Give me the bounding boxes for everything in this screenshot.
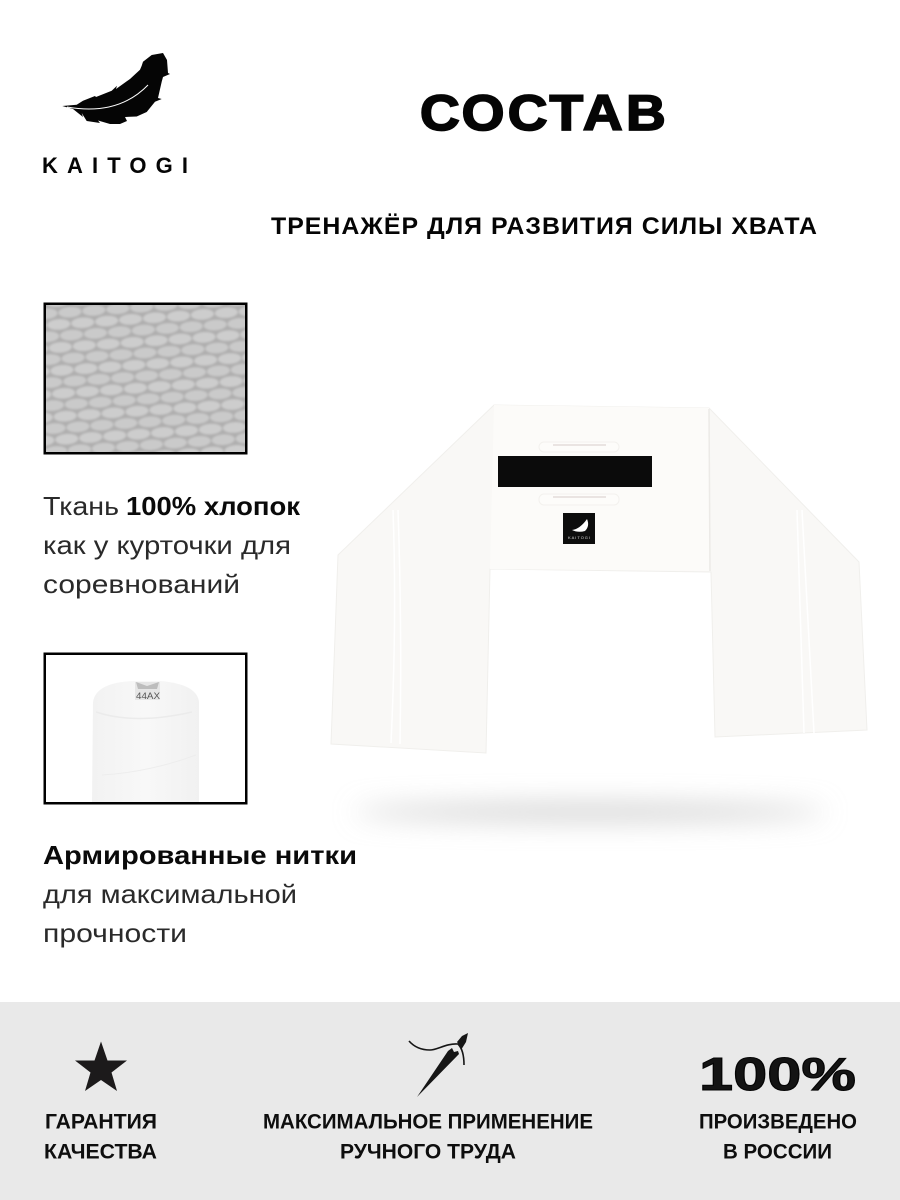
- fabric description text: [43, 491, 301, 599]
- upper slit: [539, 442, 619, 452]
- caption: РУЧНОГО ТРУДА: [340, 1140, 516, 1164]
- velcro strap: [498, 456, 652, 487]
- brand label: [563, 513, 595, 544]
- caption: В РОССИИ: [723, 1140, 832, 1164]
- icon: needle and thread: [409, 1033, 468, 1097]
- title: СОСТАВ: [420, 85, 669, 141]
- icon: star: [75, 1042, 127, 1091]
- benefit: quality guarantee: [44, 1042, 157, 1164]
- thread description text: [43, 840, 357, 948]
- fabric description text: 100% хлопок: [126, 491, 301, 521]
- 100 percent figure: 100%: [699, 1048, 856, 1100]
- ground shadow: [355, 804, 825, 820]
- bottom benefits band: [0, 1002, 900, 1200]
- thread description text: для максимальной: [43, 879, 297, 909]
- caption: КАЧЕСТВА: [44, 1140, 157, 1164]
- thread description text: прочности: [43, 918, 187, 948]
- wordmark: KAITOGI: [42, 153, 188, 178]
- brand label: KAITOGI: [568, 535, 590, 540]
- caption: ГАРАНТИЯ: [45, 1110, 157, 1134]
- fabric description text: как у курточки для: [43, 530, 291, 560]
- benefit: handmade work: [263, 1033, 593, 1164]
- fabric description text: Ткань: [43, 491, 119, 521]
- caption: [263, 1110, 593, 1164]
- caption: ПРОИЗВЕДЕНО: [699, 1110, 857, 1134]
- photo: thread spool: 44AX: [136, 691, 161, 702]
- caption: [44, 1110, 157, 1164]
- trainer body: [331, 405, 867, 753]
- fabric description text: соревнований: [43, 569, 240, 599]
- benefit: made in Russia: [699, 1048, 857, 1164]
- product photo: white grip trainer: [331, 405, 867, 820]
- logo: Kaitogi feather and wordmark: [42, 53, 188, 178]
- lower slit: [539, 494, 619, 505]
- photo: cotton fabric swatch: [44, 302, 248, 454]
- subtitle: ТРЕНАЖЁР ДЛЯ РАЗВИТИЯ СИЛЫ ХВАТА: [271, 213, 818, 240]
- icon: feather: [62, 53, 170, 124]
- thread description text: Армированные нитки: [43, 840, 357, 870]
- caption: МАКСИМАЛЬНОЕ ПРИМЕНЕНИЕ: [263, 1110, 593, 1134]
- photo: thread spool: [44, 652, 248, 804]
- caption: [699, 1110, 857, 1164]
